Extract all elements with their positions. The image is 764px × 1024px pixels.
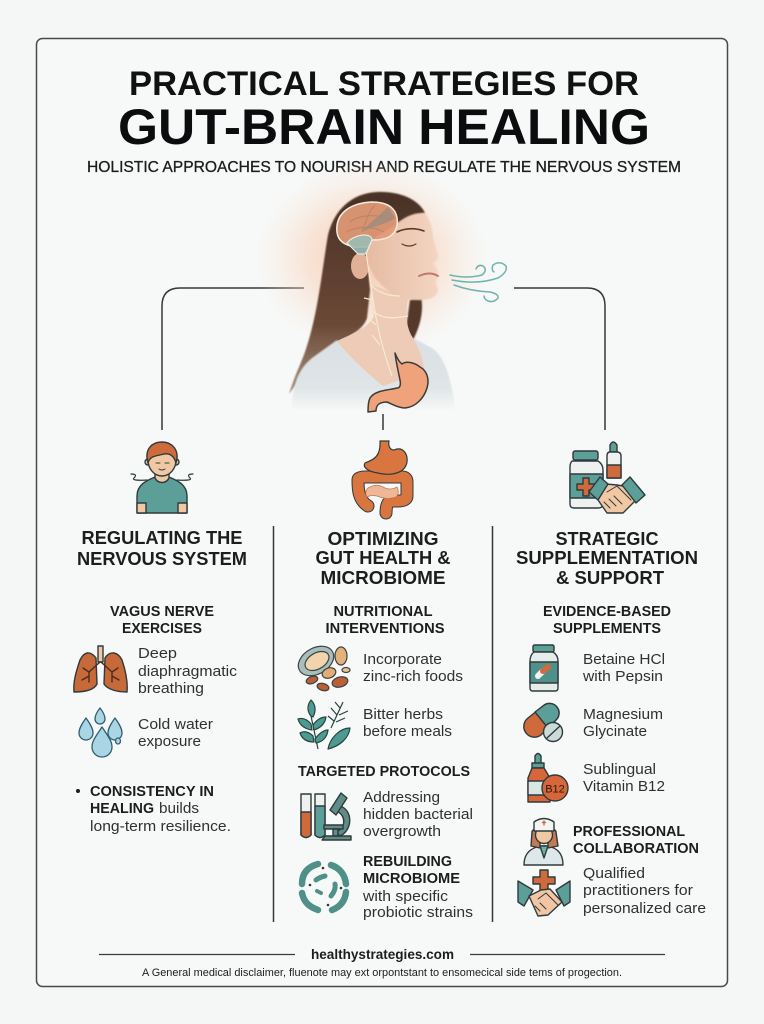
text: deep diaphragmatic breathing — [138, 645, 238, 697]
shirt — [292, 338, 455, 410]
icon: b12 dropper bottle: B12 — [545, 784, 565, 796]
heading: column 3: SUPPLEMENTATION — [516, 548, 698, 568]
callout: consistency in healing: long-term resilience. — [90, 818, 231, 835]
icon: bottle, dropper and handshake — [570, 442, 645, 513]
subheading: evidence-based supplements: EVIDENCE-BASED — [543, 604, 671, 620]
text: betaine hcl with pepsin: with Pepsin — [582, 668, 663, 685]
heading: column 3 — [516, 529, 698, 588]
text: betaine hcl with pepsin: Betaine HCl — [583, 651, 665, 668]
subheading: nutritional interventions — [326, 604, 445, 637]
heading: column 2: MICROBIOME — [320, 568, 446, 588]
closed eye and mouth — [397, 229, 438, 276]
text: qualified practitioners: personalized care — [583, 900, 706, 917]
subheading: evidence-based supplements: SUPPLEMENTS — [553, 621, 661, 637]
subheading: targeted protocols: TARGETED PROTOCOLS — [298, 764, 470, 780]
title — [118, 65, 650, 155]
heading: column 1: NERVOUS SYSTEM — [77, 549, 247, 569]
subheading: evidence-based supplements — [543, 604, 671, 637]
connector lines from central figure — [162, 288, 605, 922]
icon: person breathing — [131, 442, 193, 513]
heading: column 2 — [316, 529, 450, 588]
icon: cross and handshake — [518, 870, 570, 916]
text: qualified practitioners: practitioners for — [583, 882, 693, 899]
text: bitter herbs before meals: before meals — [363, 723, 452, 740]
text: sublingual vitamin b12: Sublingual — [583, 761, 656, 778]
text: betaine hcl with pepsin — [582, 651, 665, 685]
text: magnesium glycinate — [583, 706, 663, 740]
text: rebuilding microbiome — [362, 854, 473, 921]
icon: lungs — [74, 646, 127, 692]
text: addressing hidden bacterial overgrowth: Addressing — [363, 789, 440, 806]
text: magnesium glycinate: Glycinate — [583, 723, 647, 740]
subheading: vagus nerve exercises — [110, 604, 214, 637]
subheading: vagus nerve exercises: VAGUS NERVE — [110, 604, 214, 620]
neck and chest — [337, 285, 424, 386]
text: deep diaphragmatic breathing: breathing — [138, 680, 204, 697]
subheading: nutritional interventions: NUTRITIONAL — [334, 604, 433, 620]
text: addressing hidden bacterial overgrowth — [363, 789, 473, 840]
text: sublingual vitamin b12 — [583, 761, 665, 795]
text: incorporate zinc-rich foods — [363, 651, 463, 685]
heading: column 2: OPTIMIZING — [328, 529, 438, 549]
brain — [337, 202, 397, 254]
text: addressing hidden bacterial overgrowth: overgrowth — [363, 823, 441, 840]
text: cold water exposure — [138, 716, 213, 750]
heading: column 1: REGULATING THE — [82, 528, 242, 548]
footer website: healthystrategies.com — [311, 946, 454, 962]
title: PRACTICAL STRATEGIES FOR — [129, 65, 639, 103]
hair — [289, 192, 425, 394]
face — [367, 213, 438, 300]
callout: consistency in healing: HEALING — [90, 801, 154, 817]
heading: column 3: STRATEGIC — [556, 529, 658, 549]
text: incorporate zinc-rich foods: Incorporate — [363, 651, 442, 668]
icon: nurse practitioner — [524, 818, 563, 865]
icon: bitter herbs — [298, 700, 350, 749]
text: deep diaphragmatic breathing: diaphragmatic — [138, 663, 238, 680]
text: addressing hidden bacterial overgrowth: hidden bacterial — [363, 806, 473, 823]
callout: consistency in healing — [76, 784, 231, 835]
text: bitter herbs before meals — [363, 706, 452, 740]
icon: pill bottle — [530, 645, 558, 691]
text: qualified practitioners: Qualified — [583, 865, 645, 882]
heading: column 3: & SUPPORT — [556, 568, 664, 588]
vagus nerve — [364, 252, 408, 376]
text: magnesium glycinate: Magnesium — [583, 706, 663, 723]
text: incorporate zinc-rich foods: zinc-rich foods — [363, 668, 463, 685]
callout: consistency in healing: builds — [159, 800, 199, 817]
icon: b12 dropper bottle — [528, 754, 568, 802]
central illustration: woman with brain, vagus nerve and stomach — [254, 160, 506, 412]
far-side hair behind neck — [405, 296, 422, 340]
icon: water drops — [79, 708, 122, 757]
text: deep diaphragmatic breathing: Deep — [138, 645, 177, 662]
heading: column 2: GUT HEALTH & — [316, 548, 450, 568]
icon: capsule and tablet — [524, 703, 562, 742]
text: bitter herbs before meals: Bitter herbs — [363, 706, 443, 723]
text: rebuilding microbiome: with specific — [362, 888, 449, 905]
subtitle: HOLISTIC APPROACHES TO NOURISH AND REGULATE THE NERVOUS SYSTEM — [87, 159, 681, 176]
footer disclaimer: A General medical disclaimer, fluenote may ext orpontstant to ensomecical side tems of progection. — [142, 967, 622, 979]
icon: gut microbes — [302, 864, 346, 910]
text: rebuilding microbiome: MICROBIOME — [363, 871, 460, 887]
text: cold water exposure: exposure — [138, 733, 201, 750]
callout: consistency in healing: CONSISTENCY IN — [90, 784, 214, 800]
breath wind icon — [450, 263, 506, 302]
subheading: nutritional interventions: INTERVENTIONS — [326, 621, 445, 637]
text: rebuilding microbiome: REBUILDING — [363, 854, 452, 870]
icon: zinc-rich foods — [293, 640, 350, 692]
text: qualified practitioners — [583, 865, 706, 917]
icon: stomach and intestines — [358, 441, 407, 513]
subheading: vagus nerve exercises: EXERCISES — [122, 621, 202, 637]
subheading: professional collaboration: COLLABORATION — [573, 841, 699, 857]
icon: test tubes and microscope — [301, 793, 351, 840]
text: sublingual vitamin b12: Vitamin B12 — [583, 778, 665, 795]
subheading: professional collaboration: PROFESSIONAL — [573, 824, 685, 840]
text: cold water exposure: Cold water — [138, 716, 213, 733]
ear — [351, 253, 369, 279]
heading: column 1 — [77, 528, 247, 569]
stomach — [368, 353, 428, 412]
subheading: professional collaboration — [573, 824, 699, 857]
text: rebuilding microbiome: probiotic strains — [363, 904, 473, 921]
title: GUT-BRAIN HEALING — [118, 99, 650, 155]
